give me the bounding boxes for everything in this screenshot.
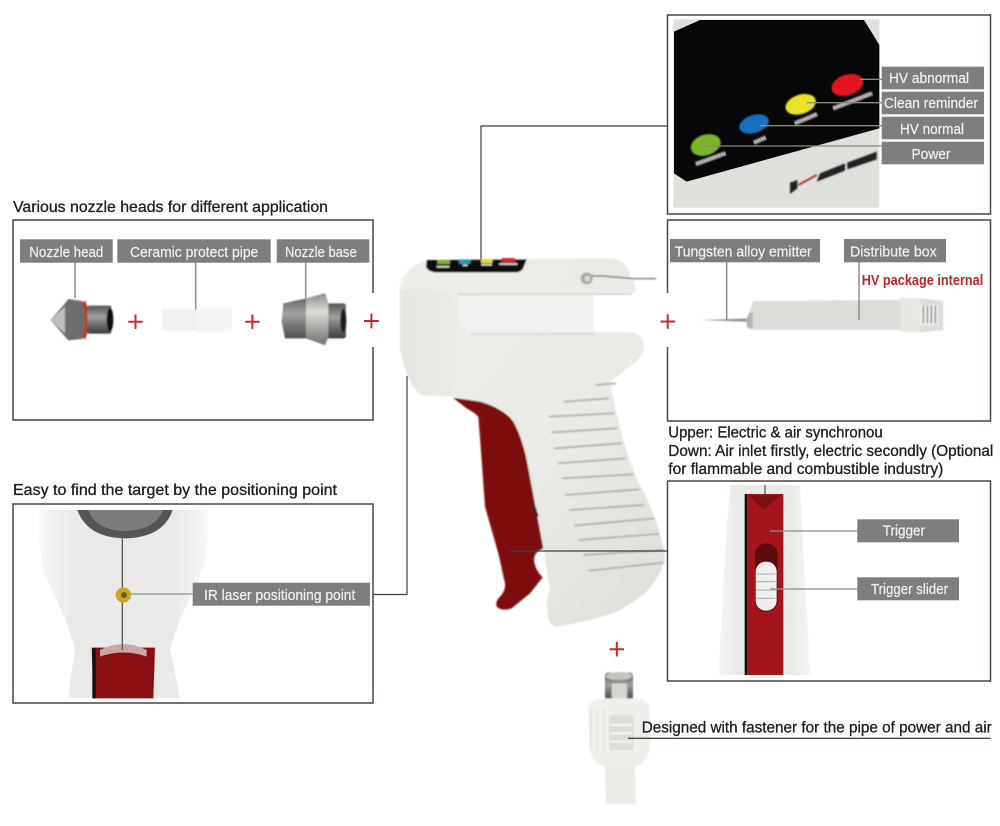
connector: indicator panel to gun	[481, 126, 667, 260]
label: Nozzle head: Nozzle head	[29, 244, 103, 261]
label: Ceramic protect pipe	[117, 239, 271, 263]
panel: tungsten emitter and distribute box	[660, 220, 990, 421]
needle emitter on gun	[592, 276, 656, 279]
panel: nozzle parts	[13, 220, 379, 420]
grooves	[550, 383, 663, 571]
plus sign	[245, 314, 260, 329]
icon: distribute box and emitter	[702, 298, 943, 332]
text block: trigger modes: Down: Air inlet firstly, electric secondly (Optional	[668, 443, 993, 460]
label: Clean reminder: Clean reminder	[884, 95, 978, 112]
plus sign	[364, 314, 379, 328]
heading: positioning point: Easy to find the target by the positioning point	[13, 482, 338, 499]
gun body	[399, 258, 665, 627]
panel: IR laser positioning	[13, 504, 373, 703]
photo: trigger close-up	[718, 485, 857, 675]
connector: IR panel to gun	[373, 376, 407, 594]
panel: status indicator lights	[668, 15, 990, 214]
icon: HV abnormal light	[829, 70, 866, 100]
plus sign	[660, 314, 675, 329]
label: Nozzle base	[277, 239, 369, 263]
icon: nozzle head part	[51, 299, 113, 340]
label: IR laser positioning point	[193, 583, 370, 606]
label: Trigger slider: Trigger slider	[871, 581, 948, 598]
leader lines: emitter and box	[727, 262, 859, 320]
text block: trigger modes: for flammable and combustible industry)	[668, 461, 943, 478]
label: HV abnormal: HV abnormal	[889, 70, 969, 87]
photo: gun front view	[39, 510, 208, 698]
icon: clean reminder light	[783, 90, 819, 118]
plus sign above fastener	[610, 642, 624, 656]
callout: fastener: Designed with fastener for the pipe of power and air	[642, 720, 992, 737]
label: Power: Power	[912, 146, 950, 163]
control panel on gun	[426, 259, 527, 272]
label: Nozzle head	[20, 239, 113, 263]
label: IR laser positioning point: IR laser positioning point	[204, 587, 356, 604]
text block: trigger modes	[668, 424, 993, 478]
heading: nozzle heads: Various nozzle heads for different application	[13, 199, 328, 216]
label: Power	[882, 142, 984, 164]
connector: trigger panel to gun	[510, 550, 667, 552]
text block: trigger modes: Upper: Electric & air synchronou	[668, 424, 883, 441]
label: Tungsten alloy emitter: Tungsten alloy emitter	[675, 244, 812, 261]
photo: control panel close-up	[673, 19, 882, 208]
icon: power and air pipe fastener	[588, 672, 650, 804]
illustration: spray gun	[399, 258, 665, 627]
label: HV normal: HV normal	[900, 121, 964, 138]
red trigger	[453, 398, 543, 610]
label: Trigger slider	[857, 577, 959, 600]
label: Distribute box	[844, 239, 946, 262]
label: HV normal	[882, 117, 984, 139]
icon: HV normal light	[737, 111, 771, 137]
label: Nozzle base: Nozzle base	[285, 244, 357, 261]
plus sign	[128, 314, 143, 329]
icon: power light	[688, 130, 723, 160]
label: Trigger: Trigger	[883, 522, 925, 540]
panel: trigger and slider	[668, 481, 990, 681]
icon: ceramic protect pipe	[162, 308, 232, 332]
label: HV abnormal	[882, 67, 984, 89]
leader lines: nozzle parts	[75, 262, 306, 322]
label: Ceramic protect pipe: Ceramic protect pipe	[130, 244, 258, 261]
label: Distribute box: Distribute box	[850, 244, 937, 261]
label: Trigger	[857, 519, 959, 542]
icon: nozzle base part	[282, 293, 346, 345]
